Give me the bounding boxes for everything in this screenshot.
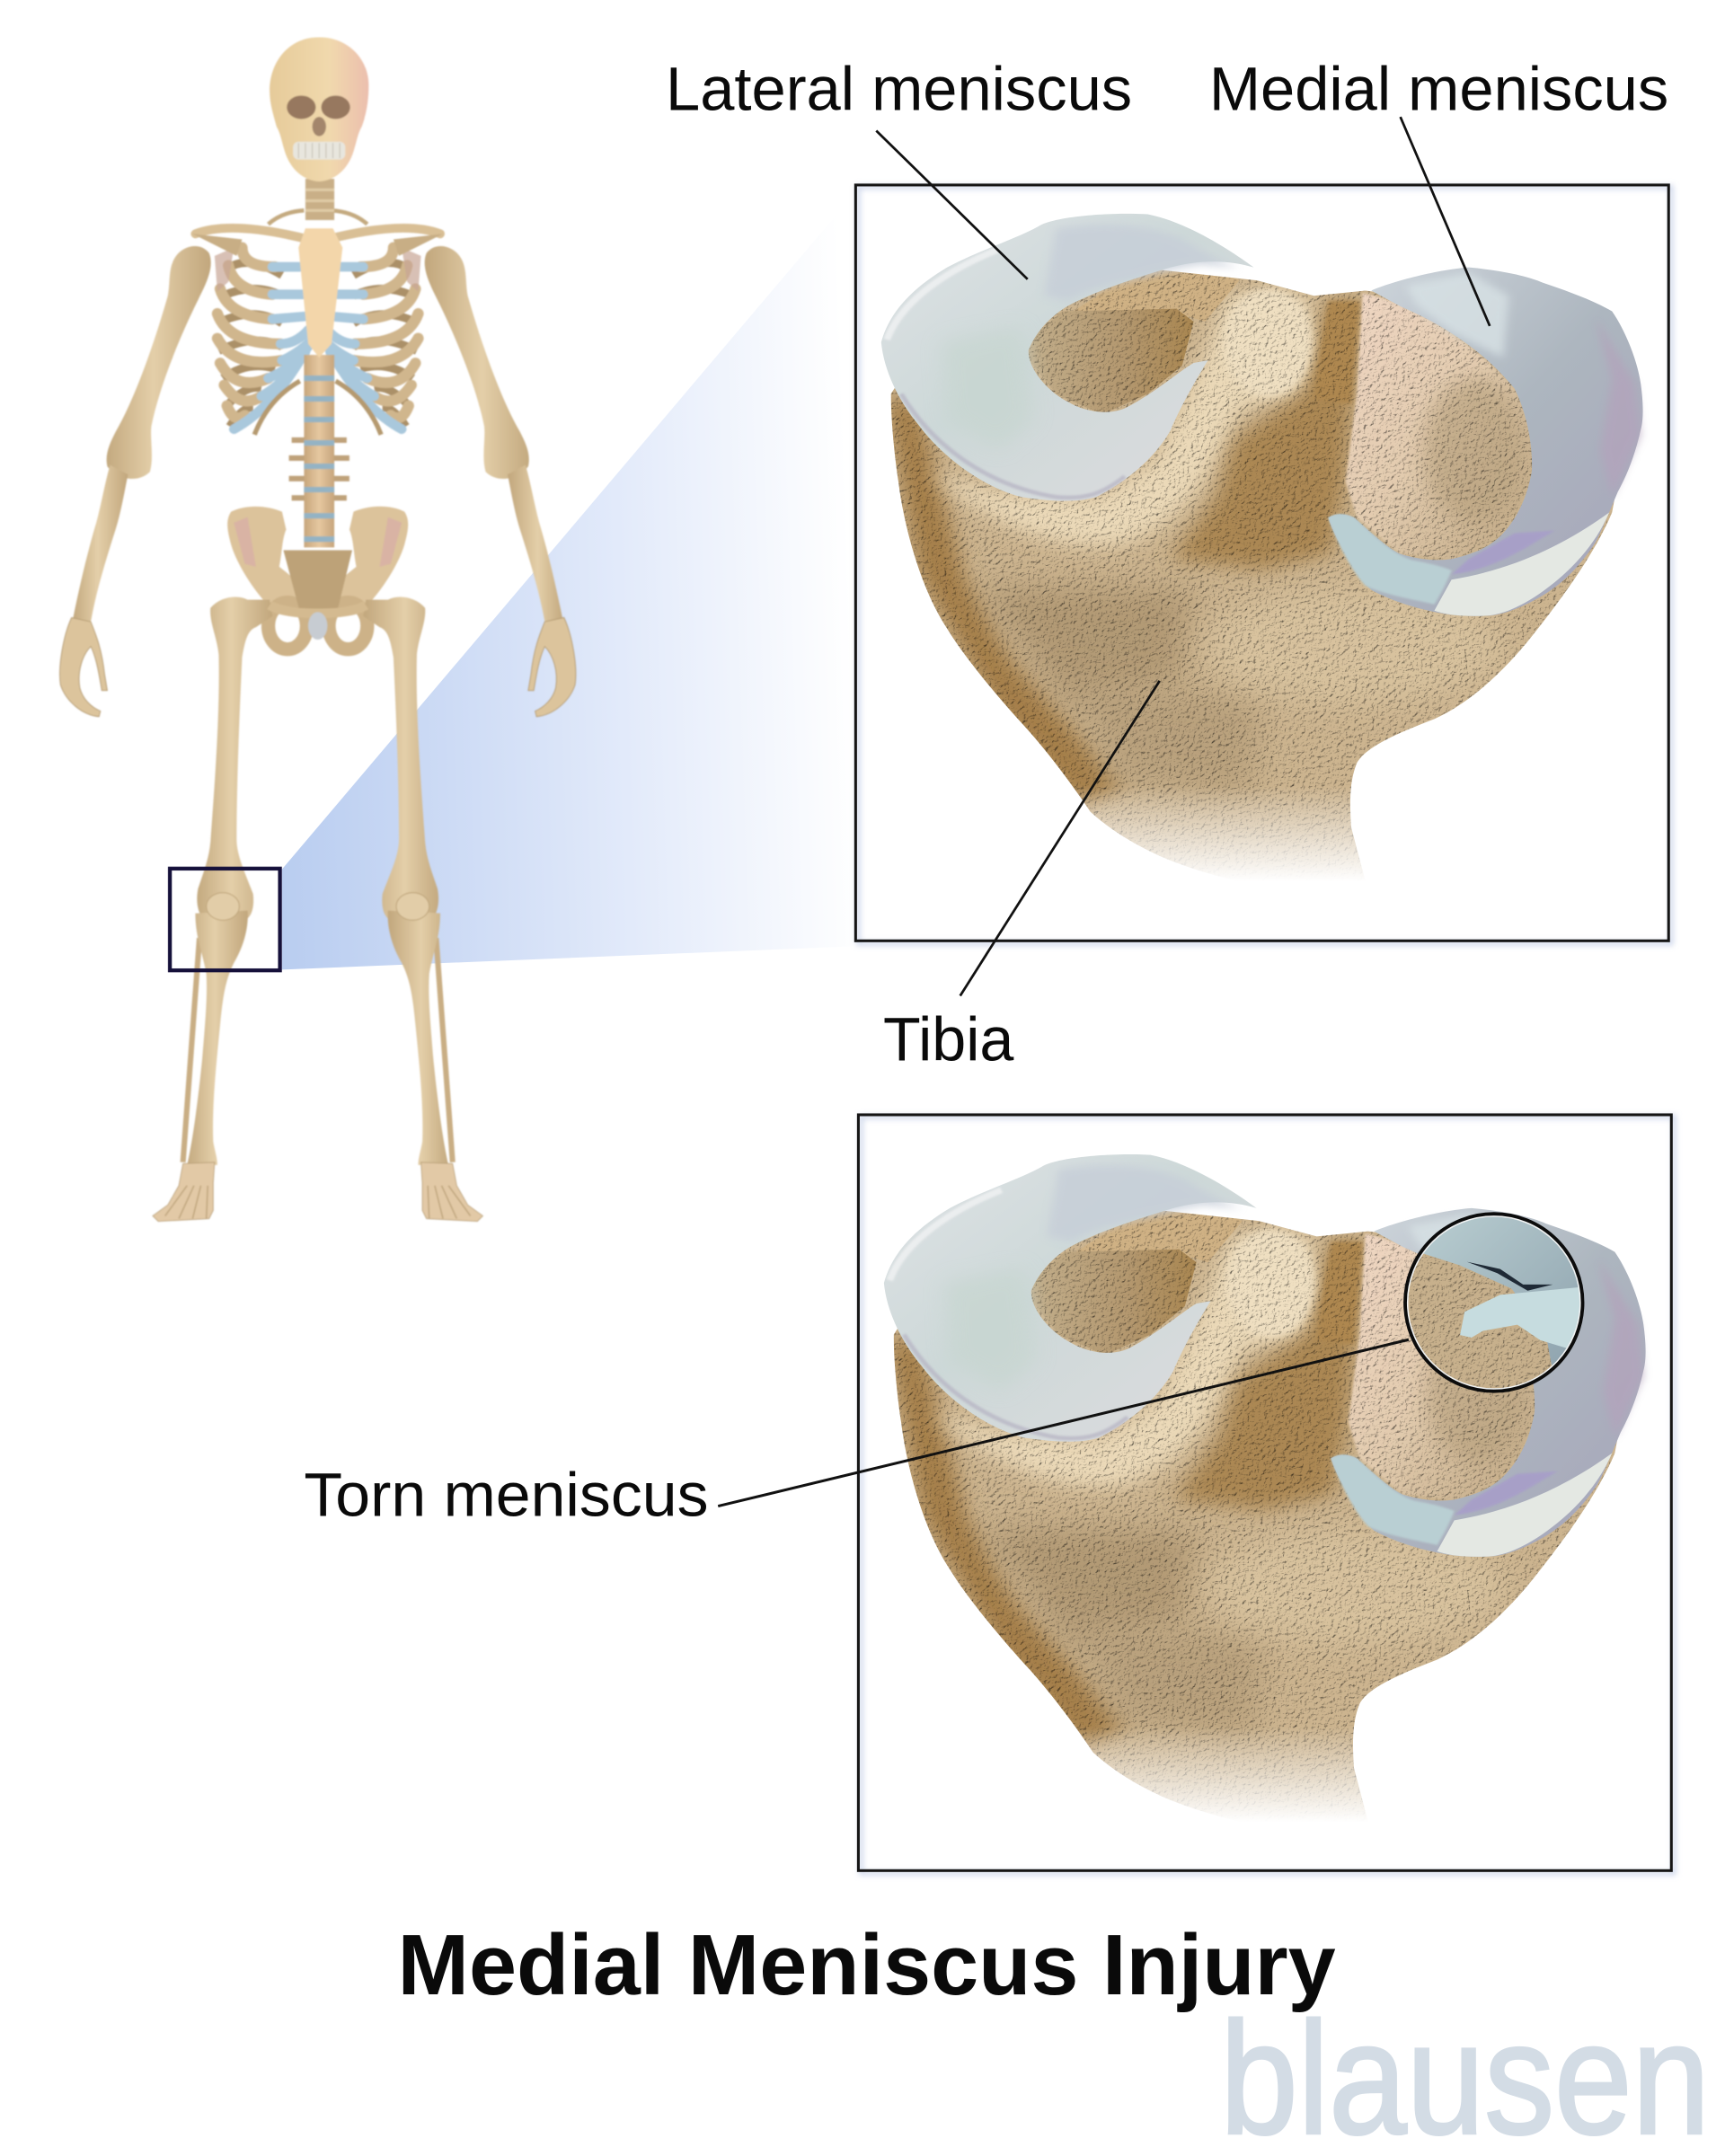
illustration: injured tibia with menisci: [829, 1102, 1724, 1835]
sternum: [298, 228, 342, 358]
zoom wedge from knee to panel: [282, 195, 853, 969]
pelvic floor: [308, 612, 327, 640]
skull: [270, 37, 368, 181]
label: medial meniscus: Medial meniscus: [1209, 54, 1668, 123]
label: tibia: Tibia: [883, 1004, 1014, 1074]
meniscus inside magnifier: [1423, 1216, 1578, 1365]
leader: torn meniscus: [718, 1339, 1409, 1507]
magnifier ring: [1405, 1214, 1583, 1392]
leader: tibia: [960, 681, 1160, 996]
leader: medial meniscus: [1401, 117, 1490, 326]
torn flap: [1460, 1287, 1579, 1348]
label: torn meniscus: Torn meniscus: [304, 1460, 709, 1529]
tear: [1467, 1262, 1552, 1291]
label: lateral meniscus: Lateral meniscus: [666, 54, 1132, 123]
skeleton right half: [322, 210, 576, 1222]
neck: [305, 179, 334, 220]
magnified tear: [1409, 1216, 1579, 1389]
bone inside magnifier: [1409, 1254, 1552, 1389]
pubic bridge: [270, 605, 366, 614]
panel: healthy knee shadow: [858, 187, 1671, 943]
skeleton left half: [60, 210, 314, 1222]
spine: [289, 355, 349, 547]
panel: injured knee shadow: [861, 1117, 1674, 1873]
sacrum: [283, 550, 352, 612]
knee highlight box: [170, 869, 280, 970]
leader: lateral meniscus: [876, 130, 1028, 279]
panel: healthy knee frame: [855, 185, 1668, 941]
title: Medial Meniscus Injury: [397, 1918, 1336, 2013]
panel: injured knee frame: [858, 1115, 1671, 1870]
skeleton figure: [60, 37, 576, 1222]
illustration: healthy tibia with menisci: [827, 162, 1721, 895]
